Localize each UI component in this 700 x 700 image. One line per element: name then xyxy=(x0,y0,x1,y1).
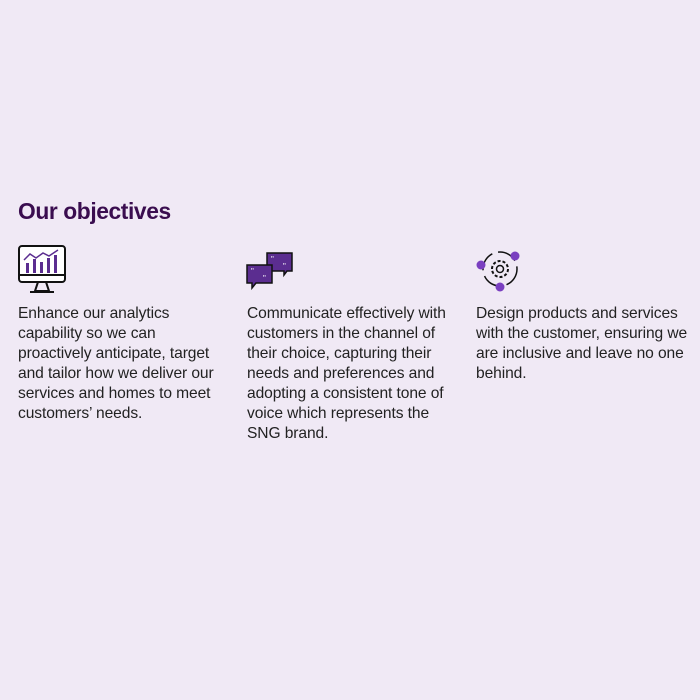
text: objective 1: services and homes to meet xyxy=(18,385,210,402)
text: objective 1: proactively anticipate, target xyxy=(18,345,209,362)
text: objective 2: SNG brand. xyxy=(247,425,328,442)
icon: gear cycle xyxy=(476,251,520,292)
text: objective 2: needs and preferences and xyxy=(247,365,434,382)
text: objective 3: with the customer, ensuring we xyxy=(476,325,687,342)
text: objective 1: capability so we can xyxy=(18,325,156,342)
text: objective 1: customers’ needs. xyxy=(18,405,142,422)
text: objective 2: voice which represents the xyxy=(247,405,429,422)
text: objective 2: Communicate effectively with xyxy=(247,305,446,322)
text: objective 1: Enhance our analytics xyxy=(18,305,169,322)
text: objective 3 xyxy=(476,305,687,382)
icon: speech bubbles: " xyxy=(251,267,254,276)
icon: monitor chart xyxy=(18,245,66,293)
icon: speech bubbles: " xyxy=(283,262,286,271)
icon: speech bubbles: " xyxy=(271,255,274,264)
text: objective 3: Design products and services xyxy=(476,305,678,322)
text: objective 3: are inclusive and leave no one xyxy=(476,345,684,362)
text: objective 3: behind. xyxy=(476,365,526,382)
text: objective 2: adopting a consistent tone of xyxy=(247,385,444,402)
icon: speech bubbles xyxy=(246,252,293,290)
text: objective 1: and tailor how we deliver our xyxy=(18,365,214,382)
text: objective 1 xyxy=(18,305,214,422)
text: objective 2 xyxy=(247,305,446,442)
title: Our objectives xyxy=(18,198,171,224)
text: objective 2: customers in the channel of xyxy=(247,325,435,342)
icon: speech bubbles: " xyxy=(263,274,266,283)
text: objective 2: their choice, capturing their xyxy=(247,345,431,362)
